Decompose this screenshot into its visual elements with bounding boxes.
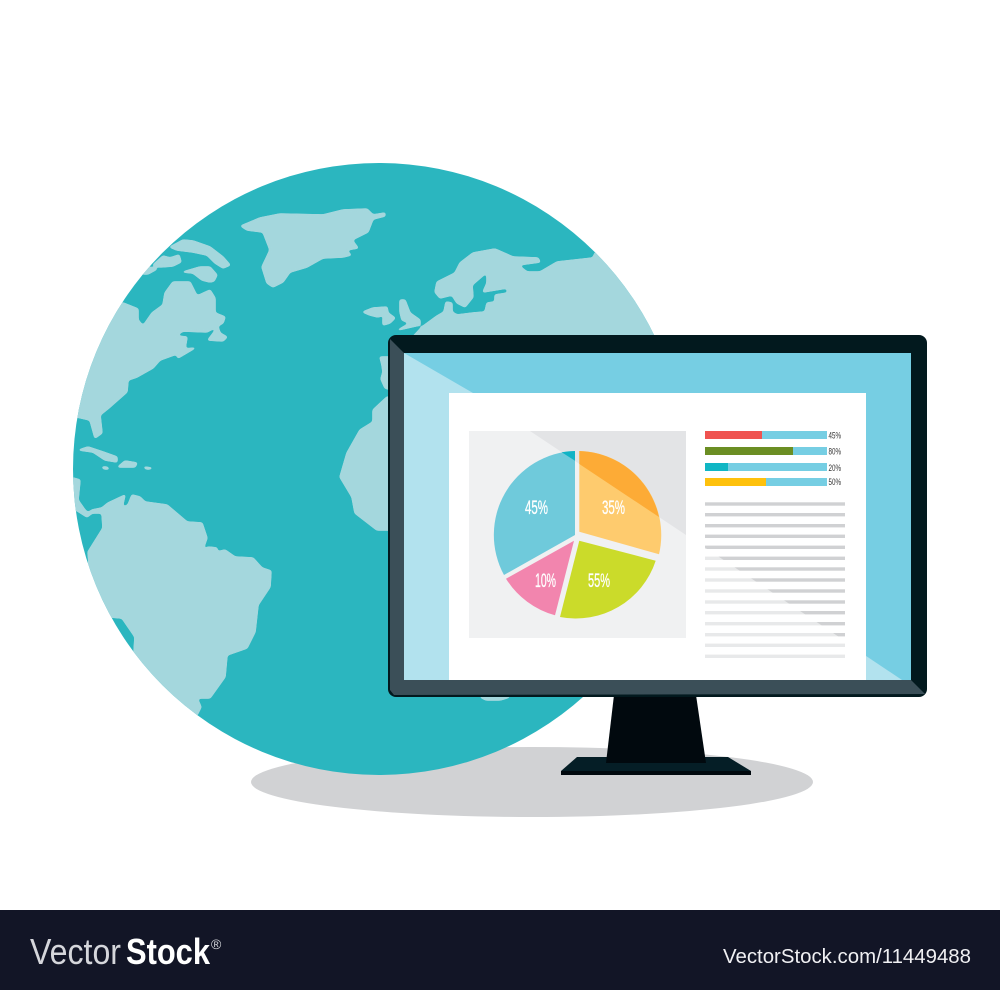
land: southern tip — [480, 697, 510, 700]
logo wordmark: Stock — [126, 931, 211, 972]
pie chart — [494, 451, 661, 619]
pie labels: 35% — [602, 498, 625, 519]
land: Greenland — [241, 209, 385, 287]
image id: VectorStock.com/11449488 — [723, 946, 971, 968]
slice: 55% green — [560, 541, 656, 619]
land: Iceland — [363, 307, 388, 317]
chart panel — [469, 431, 686, 638]
progress bars — [705, 430, 841, 487]
screen highlight — [404, 353, 902, 680]
pie labels — [525, 498, 625, 592]
bar: 45%: 45% — [828, 430, 841, 440]
land: Iberia — [380, 356, 388, 390]
monitor — [388, 335, 927, 697]
slice accent: teal — [562, 451, 575, 461]
monitor frame — [388, 335, 927, 697]
bar: 80%: 80% — [828, 446, 841, 456]
land: Europe and Asia — [410, 200, 700, 340]
logo wordmark: ® — [211, 936, 222, 952]
footer band — [0, 910, 1000, 990]
slice: 35% orange — [579, 451, 661, 554]
pie labels: 55% — [588, 571, 610, 592]
bar: 50%: 50% — [828, 477, 841, 487]
land: North America — [77, 281, 226, 438]
left bezel — [390, 339, 404, 680]
placeholder text lines — [700, 502, 850, 660]
land: Arctic islands — [142, 240, 230, 282]
monitor stand — [561, 695, 751, 775]
slice: 10% pink — [506, 541, 574, 615]
land: Africa — [340, 396, 388, 531]
slice: 45% blue — [494, 451, 575, 575]
bottom bezel — [390, 680, 925, 695]
ground shadow — [251, 747, 813, 817]
land: Great Britain — [398, 300, 420, 330]
land: Newfoundland — [208, 327, 227, 341]
logo wordmark: Vector — [30, 931, 121, 972]
logo wordmark — [30, 931, 222, 972]
slice accent: dark orange — [579, 451, 659, 517]
land: Ireland — [383, 313, 395, 325]
globe — [73, 163, 654, 775]
land: Caribbean islands — [79, 447, 152, 469]
bar: 20%: 20% — [828, 463, 841, 473]
screen — [404, 353, 911, 680]
land: South and Central America — [60, 478, 271, 725]
pie labels: 45% — [525, 498, 548, 519]
document page — [449, 393, 866, 680]
pie labels: 10% — [535, 571, 556, 592]
